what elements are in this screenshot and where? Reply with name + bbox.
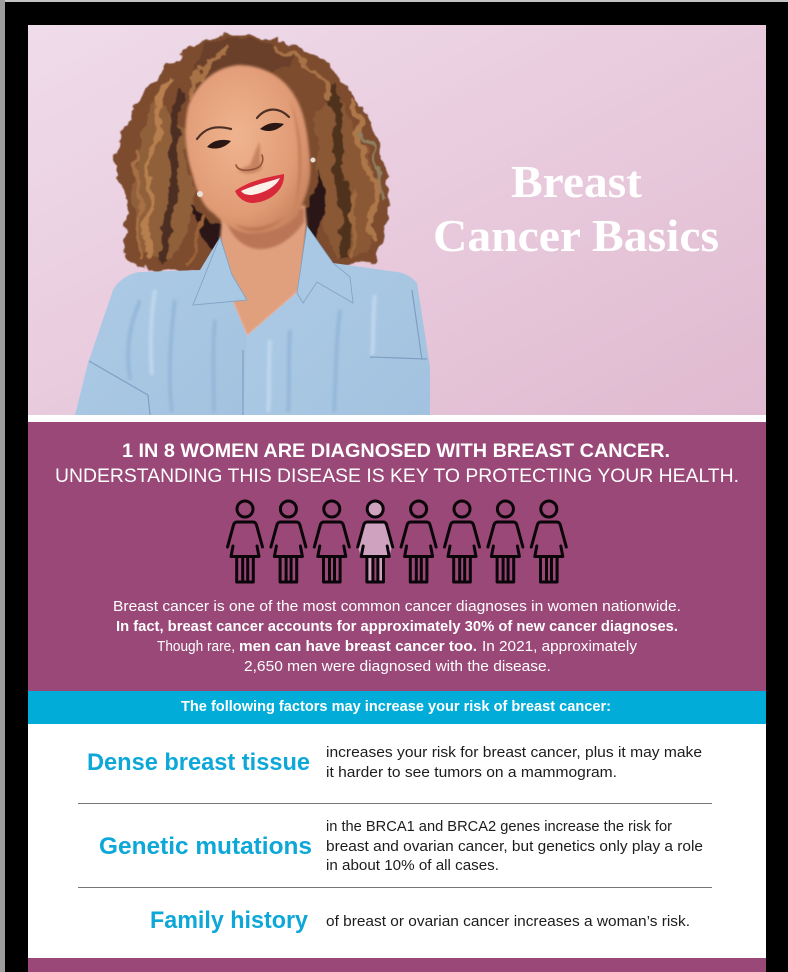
risk factor: dense breast tissue <box>87 745 702 781</box>
smile <box>235 174 284 203</box>
panel: statistics <box>28 422 766 691</box>
face <box>185 65 310 233</box>
nose <box>236 155 263 170</box>
bottom purple band <box>28 958 766 972</box>
statistic body text: In fact, breast cancer accounts for approximately 30% of new cancer diagnoses. <box>116 619 678 635</box>
hero title <box>433 156 719 261</box>
risk factor: genetic mutations: breast and ovarian cancer, but genetics only play a role <box>326 839 703 855</box>
face shading <box>235 100 301 232</box>
panel: risk factors <box>28 724 766 958</box>
shirt collars <box>193 237 247 305</box>
panel: risk factor banner <box>28 691 766 724</box>
risk factor: genetic mutations <box>99 819 703 874</box>
eyebrows <box>197 110 289 139</box>
hero title: Cancer Basics <box>433 210 719 261</box>
neck and chest <box>220 205 307 336</box>
statistic body text: In 2021, approximately <box>482 639 638 655</box>
hair <box>114 35 390 272</box>
risk factor: family history: of breast or ovarian cancer increases a woman’s risk. <box>326 914 690 930</box>
panel: hero photo <box>28 25 766 415</box>
shirt <box>75 237 247 415</box>
photo background <box>28 25 766 415</box>
statistic heading <box>55 441 739 487</box>
statistic body text: 2,650 men were diagnosed with the disease. <box>244 659 551 675</box>
risk factor: dense breast tissue: it harder to see tumors on a mammogram. <box>326 765 617 781</box>
risk factor: genetic mutations: in about 10% of all cases. <box>326 858 499 874</box>
risk factor: genetic mutations: in the BRCA1 and BRCA2 genes increase the risk for <box>326 819 672 835</box>
hero title: Breast <box>511 156 643 207</box>
photo: smiling woman in denim shirt <box>75 35 430 415</box>
statistic body text <box>113 599 681 675</box>
icon: 1 in 8 women <box>228 501 566 582</box>
statistic body text: Breast cancer is one of the most common cancer diagnoses in women nationwide. <box>113 599 681 615</box>
eyes <box>207 123 284 149</box>
statistic body text: Though rare, <box>157 639 235 655</box>
risk factor: family history <box>150 907 690 934</box>
risk factor: genetic mutations: Genetic mutations <box>99 833 312 860</box>
earrings <box>197 158 316 197</box>
statistic heading: UNDERSTANDING THIS DISEASE IS KEY TO PROTECTING YOUR HEALTH. <box>55 466 739 487</box>
risk factor: dense breast tissue: increases your risk for breast cancer, plus it may make <box>326 745 702 761</box>
statistic body text: men can have breast cancer too. <box>239 639 477 655</box>
risk factor: family history: Family history <box>150 907 309 934</box>
risk factor: dense breast tissue: Dense breast tissue <box>87 749 310 776</box>
white separator band <box>28 415 766 422</box>
statistic heading: 1 IN 8 WOMEN ARE DIAGNOSED WITH BREAST CANCER. <box>122 441 670 462</box>
panel: risk factor banner: The following factors may increase your risk of breast cancer: <box>181 699 611 715</box>
